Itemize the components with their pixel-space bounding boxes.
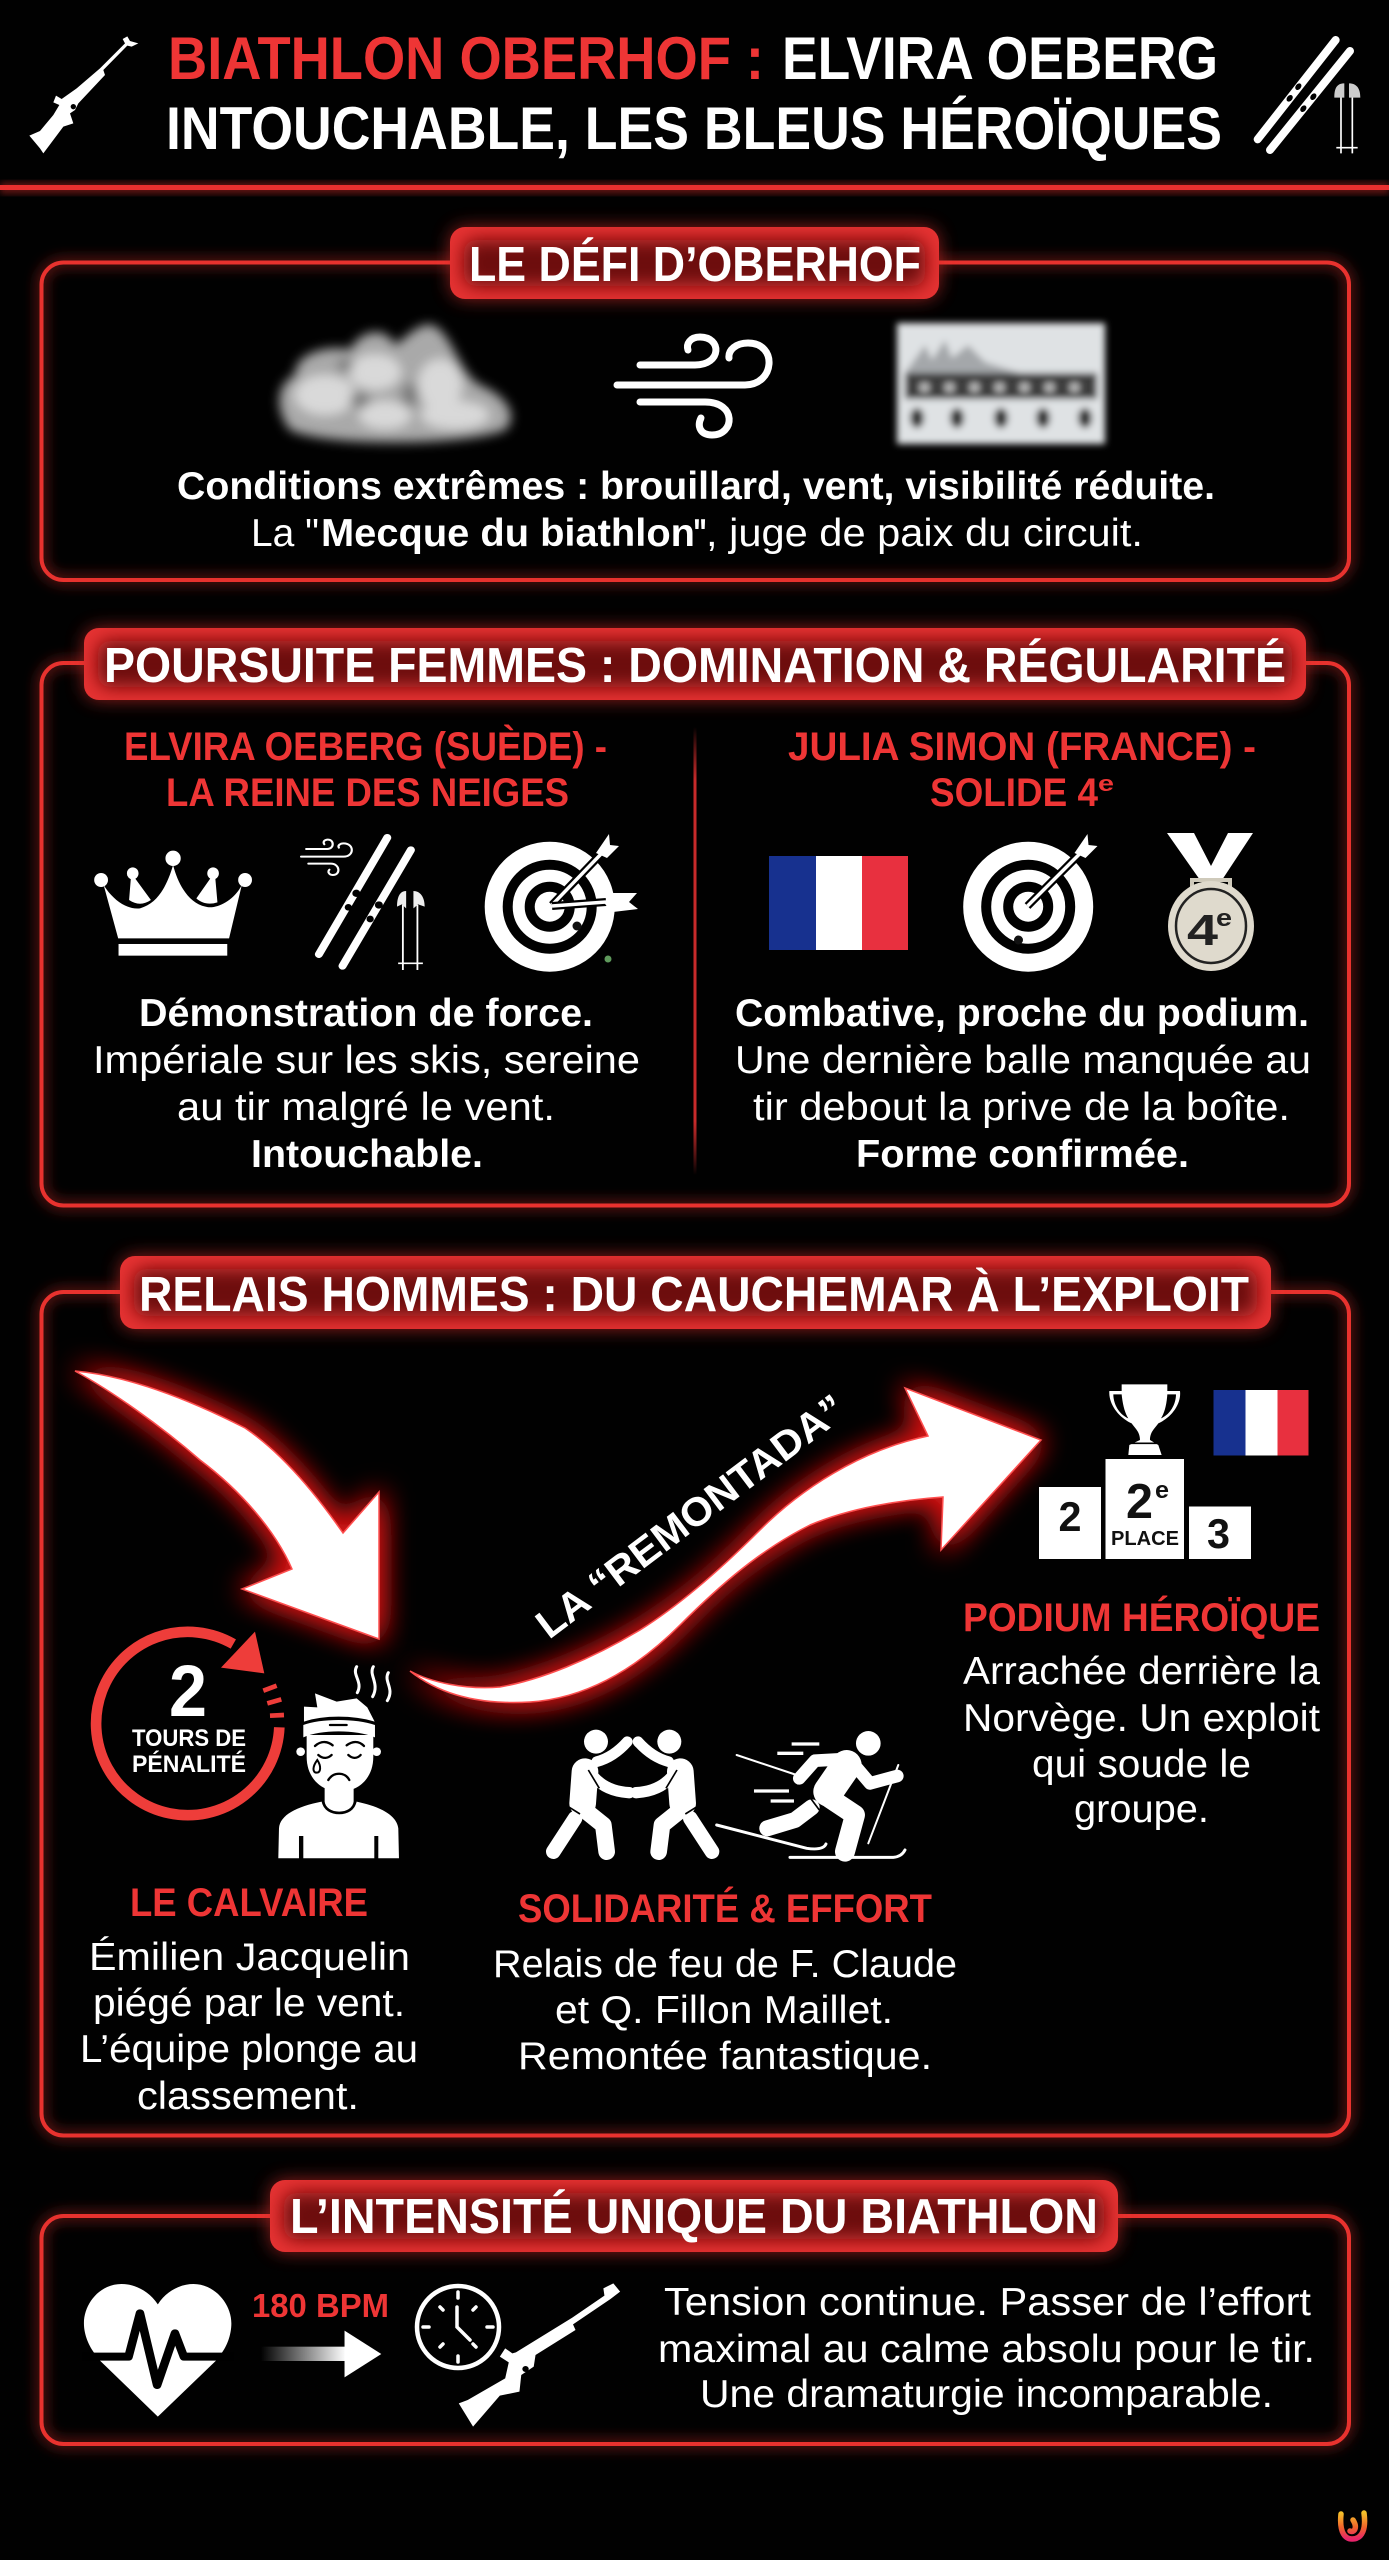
icon: rifle	[459, 2283, 620, 2427]
subheading	[124, 724, 607, 815]
icon: wind	[617, 337, 769, 435]
text: solidarité: et Q. Fillon Maillet.	[555, 1989, 893, 2032]
text: conditions: , juge de paix du circuit.	[706, 512, 1143, 555]
title: INTOUCHABLE, LES BLEUS HÉROÏQUES	[166, 95, 1222, 162]
text: podium héroïque: Arrachée derrière la	[963, 1650, 1320, 1693]
text: combative: tir debout la prive de la boîte.	[753, 1086, 1290, 1129]
text: démonstration de force: Impériale sur les skis, sereine	[93, 1039, 640, 1082]
subheading	[788, 725, 1256, 815]
heading: POURSUITE FEMMES : DOMINATION & RÉGULARITÉ	[104, 639, 1286, 693]
text: podium héroïque: qui soude le	[1032, 1743, 1251, 1786]
icon: penalty loop: TOURS DE	[132, 1725, 246, 1752]
text: démonstration de force: Intouchable.	[251, 1133, 483, 1176]
panel: relais hommes	[42, 1256, 1349, 2136]
text: solidarité: SOLIDARITÉ & EFFORT	[518, 1886, 932, 1931]
icon: french flag small	[1214, 1390, 1308, 1456]
icon: trophy	[1109, 1384, 1180, 1455]
icon: teammates high five	[553, 1730, 712, 1852]
subheading: LA REINE DES NEIGES	[166, 771, 569, 815]
text: combative	[735, 992, 1311, 1176]
title	[166, 25, 1222, 162]
text: le calvaire: Émilien Jacquelin	[89, 1936, 410, 1979]
text: conditions: Mecque du biathlon	[321, 512, 695, 555]
icon: medal: e	[1216, 905, 1232, 932]
icon: rifle	[29, 36, 138, 153]
panel: intensité	[42, 2180, 1349, 2444]
text: conditions: Conditions extrêmes : brouillard, vent, visibilité réduite.	[177, 465, 1215, 508]
text: conditions: La "	[251, 512, 319, 555]
text: le calvaire: piégé par le vent.	[93, 1982, 405, 2025]
title: BIATHLON OBERHOF :	[168, 25, 764, 92]
text: podium héroïque	[963, 1595, 1320, 1831]
text: le calvaire: LE CALVAIRE	[130, 1881, 368, 1925]
arrow: remontada	[410, 1388, 1041, 1703]
panel frame	[42, 663, 1349, 1206]
text: podium héroïque: groupe.	[1074, 1788, 1209, 1831]
text: le calvaire	[80, 1881, 418, 2118]
icon: podium: 2	[1058, 1493, 1082, 1540]
heading: L’INTENSITÉ UNIQUE DU BIATHLON	[290, 2190, 1098, 2244]
icon: exhausted athlete	[278, 1667, 399, 1858]
column: Elvira Oeberg	[93, 724, 640, 1176]
icon: fog cloud	[279, 325, 511, 442]
heading: RELAIS HOMMES : DU CAUCHEMAR À L’EXPLOIT	[139, 1268, 1249, 1322]
text: tension continue: maximal au calme absolu pour le tir.	[658, 2328, 1315, 2371]
text: tension continue: Tension continue. Passer de l’effort	[664, 2281, 1311, 2324]
heading	[450, 227, 939, 299]
icon: blurred shooting range	[897, 323, 1105, 444]
text: solidarité: Remontée fantastique.	[518, 2035, 932, 2078]
text: podium héroïque: Norvège. Un exploit	[963, 1697, 1320, 1740]
icon: corner logo	[1341, 2513, 1365, 2539]
icon: penalty loop: 2	[169, 1651, 207, 1732]
icon: french flag	[769, 856, 908, 950]
icon: podium: e	[1155, 1477, 1169, 1504]
icon: penalty loop: PÉNALITÉ	[132, 1750, 246, 1778]
icon: medal: 4	[1187, 906, 1219, 955]
subheading: e	[1098, 771, 1114, 796]
icon: podium: 2	[1126, 1475, 1153, 1529]
icon: medal	[1167, 833, 1254, 971]
panel: le défi d'Oberhof	[42, 227, 1349, 580]
panel frame	[42, 2216, 1349, 2444]
text: démonstration de force: au tir malgré le vent.	[177, 1086, 555, 1129]
text: combative: Forme confirmée.	[856, 1133, 1189, 1176]
label: la remontada: LA “REMONTADA”	[528, 1386, 854, 1647]
icon: skis and wind	[301, 838, 425, 970]
header	[29, 25, 1360, 162]
panel: poursuite femmes	[42, 628, 1349, 1206]
panel frame	[42, 1292, 1349, 2136]
text: conditions: "	[693, 512, 707, 555]
subheading: JULIA SIMON (FRANCE) -	[788, 725, 1256, 769]
text: combative: Une dernière balle manquée au	[735, 1039, 1311, 1082]
text: combative: Combative, proche du podium.	[735, 992, 1309, 1035]
label: 180 BPM: 180 BPM	[252, 2287, 389, 2324]
icon: crown	[94, 851, 252, 956]
text: solidarité: Relais de feu de F. Claude	[493, 1943, 957, 1986]
text: le calvaire: L’équipe plonge au	[80, 2028, 418, 2071]
icon: podium	[1039, 1459, 1251, 1559]
icon: skis and poles	[1258, 40, 1360, 153]
text: solidarité	[493, 1886, 957, 2078]
icon: penalty loop	[96, 1632, 284, 1815]
icon: target with arrows	[494, 834, 638, 963]
title: ELVIRA OEBERG	[782, 25, 1218, 92]
icon: podium: PLACE	[1111, 1527, 1179, 1550]
icon: heart with pulse	[82, 2284, 234, 2417]
subheading: SOLIDE 4	[930, 771, 1099, 815]
text: tension continue	[658, 2281, 1315, 2416]
header rule	[0, 182, 1389, 194]
icon: target with arrow	[972, 834, 1098, 963]
text: démonstration de force	[93, 992, 640, 1176]
icon: podium: 3	[1207, 1510, 1230, 1557]
text: le calvaire: classement.	[137, 2075, 359, 2118]
heading: LE DÉFI D’OBERHOF	[469, 238, 921, 292]
subheading: ELVIRA OEBERG (SUÈDE) -	[124, 724, 607, 769]
text: tension continue: Une dramaturgie incomparable.	[700, 2373, 1273, 2416]
arrow: effort to calm	[261, 2331, 381, 2377]
column: Julia Simon	[735, 725, 1311, 1176]
panel frame	[42, 262, 1349, 580]
icon: skier	[717, 1731, 905, 1857]
icon: clock	[417, 2286, 499, 2368]
arrow: descent	[75, 1371, 379, 1639]
text: démonstration de force: Démonstration de force.	[139, 992, 593, 1035]
text: conditions	[177, 465, 1215, 555]
text: podium héroïque: PODIUM HÉROÏQUE	[963, 1595, 1320, 1640]
